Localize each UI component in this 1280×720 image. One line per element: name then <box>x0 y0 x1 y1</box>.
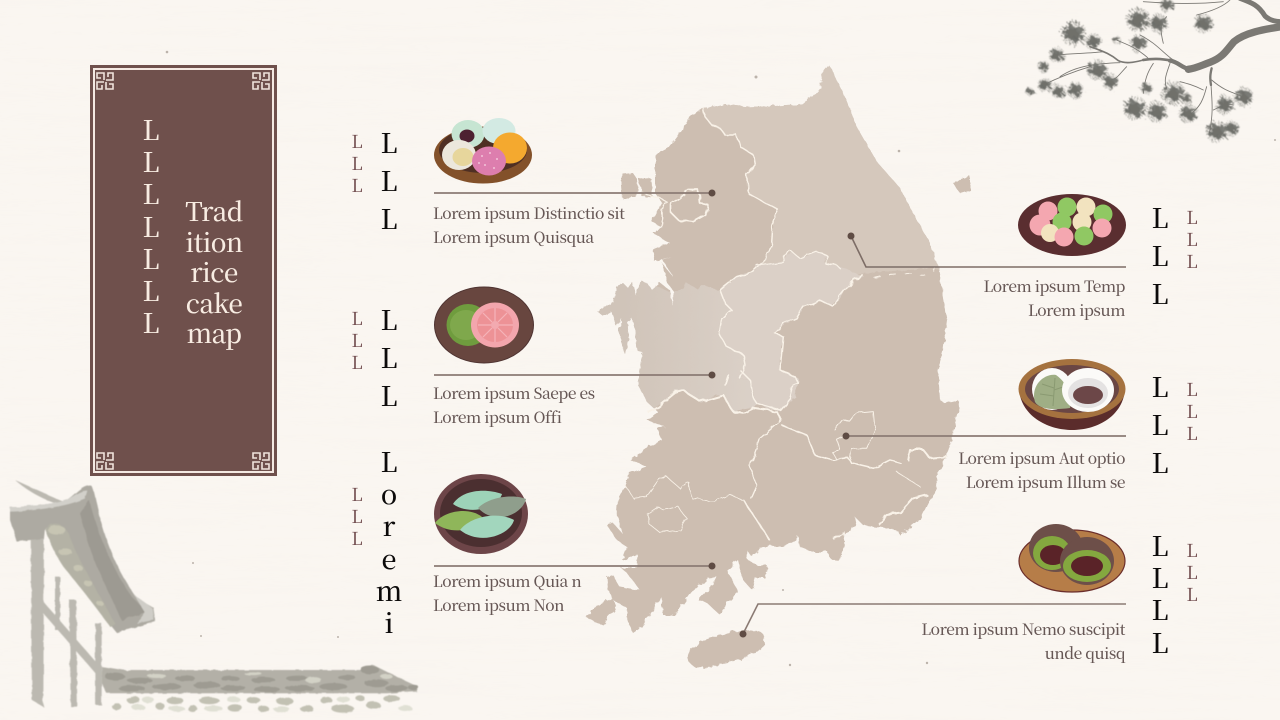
icon: plate with leaf-wrapped rice cakes <box>434 474 528 554</box>
item 1 large label: L <box>380 122 398 161</box>
panel title: rice <box>190 253 238 290</box>
item 1 description: Lorem ipsum Quisqua <box>433 226 594 248</box>
item 1 small label: L <box>351 128 363 154</box>
island: Ulleung <box>952 176 970 193</box>
item 3 small label: L <box>351 481 363 507</box>
panel vertical subtitle: L <box>142 302 160 341</box>
corner ornaments <box>96 72 270 470</box>
leader line: item 1 <box>434 190 716 196</box>
item 3 description <box>433 570 582 616</box>
panel title: Trad <box>185 192 243 229</box>
item 5 large label: L <box>1151 404 1168 443</box>
item 2 small label: L <box>351 327 363 353</box>
item 4 large label: L <box>1151 235 1168 274</box>
item 6 small label: L <box>1186 537 1198 563</box>
item 4 description <box>983 275 1125 321</box>
leader line: item 6 <box>740 604 1126 638</box>
icon: wooden plate with green-ringed rice cakes <box>1018 524 1126 593</box>
item 5 small label <box>1186 376 1198 446</box>
item 5 small label: L <box>1186 398 1198 424</box>
item 3 description: Lorem ipsum Non <box>433 594 564 616</box>
icon: plate with green and pink rice cakes <box>434 286 534 364</box>
leader line: item 5 <box>842 432 1126 440</box>
item 6 large label: L <box>1151 557 1168 596</box>
item 3 small label: L <box>351 525 363 551</box>
item 4 large label: L <box>1151 197 1168 236</box>
item 6 description: Lorem ipsum Nemo suscipit <box>921 618 1125 640</box>
item 1 large label <box>380 122 398 237</box>
item 2 description: Lorem ipsum Saepe es <box>433 382 595 404</box>
item 6 large label: L <box>1151 525 1168 564</box>
panel vertical subtitle: L <box>142 238 160 277</box>
panel vertical subtitle: L <box>142 206 160 245</box>
item 1 description <box>433 202 625 248</box>
item 6 description <box>921 618 1126 664</box>
specks on paper <box>166 51 1276 666</box>
item 3 large label: i <box>384 602 394 641</box>
item 5 large label: L <box>1151 366 1168 405</box>
item 6 small label <box>1186 537 1198 607</box>
item 2 small label: L <box>351 349 363 375</box>
item 2 large label <box>380 299 398 414</box>
item 1 small label: L <box>351 150 363 176</box>
map of South Korea <box>580 50 990 668</box>
item 6 large label: L <box>1151 622 1168 661</box>
region: Gangwon <box>704 66 940 274</box>
item 4 small label: L <box>1186 204 1198 230</box>
item 5 description: Lorem ipsum Aut optio <box>958 447 1125 469</box>
item 5 small label: L <box>1186 376 1198 402</box>
item 1 small label <box>351 128 363 198</box>
item 3 large label: e <box>382 538 396 577</box>
leader line: item 3 <box>434 562 716 570</box>
item 5 large label: L <box>1151 442 1168 481</box>
item 3 large label: r <box>383 505 395 544</box>
panel vertical subtitle: L <box>142 109 160 148</box>
item 3 large label: m <box>376 570 402 609</box>
item 5 small label: L <box>1186 420 1198 446</box>
panel title <box>185 192 243 351</box>
item 3 large label <box>376 441 402 641</box>
item 2 small label <box>351 305 363 375</box>
item 6 large label: L <box>1151 589 1168 628</box>
item 4 description: Lorem ipsum Temp <box>983 275 1125 297</box>
region: Chungbuk <box>718 250 863 412</box>
panel vertical subtitle <box>142 109 160 341</box>
panel title: ition <box>185 223 243 260</box>
item 5 description: Lorem ipsum Illum se <box>966 471 1125 493</box>
item 3 description: Lorem ipsum Quia n <box>433 570 581 592</box>
item 2 small label: L <box>351 305 363 331</box>
title panel <box>90 65 277 476</box>
item 4 description: Lorem ipsum <box>1028 299 1125 321</box>
island: Ganghwa <box>621 172 638 198</box>
item 2 large label: L <box>380 299 398 338</box>
item 1 description: Lorem ipsum Distinctio sit <box>433 202 624 224</box>
item 5 large label <box>1151 366 1168 481</box>
icon: wooden bowl with white rice cakes <box>1018 359 1126 430</box>
item 5 description <box>958 447 1125 493</box>
leader line: item 4 <box>848 232 1126 267</box>
region borders <box>625 108 947 540</box>
island: Jeju <box>688 630 765 668</box>
panel vertical subtitle: L <box>142 270 160 309</box>
item 1 small label: L <box>351 172 363 198</box>
illustration: hanok roof and stone wall <box>10 480 419 713</box>
item 4 small label: L <box>1186 226 1198 252</box>
item 3 large label: L <box>380 441 398 480</box>
item 4 large label: L <box>1151 273 1168 312</box>
item 4 small label <box>1186 204 1198 274</box>
panel vertical subtitle: L <box>142 141 160 180</box>
illustration: pine branch <box>1027 0 1280 140</box>
icon: bowl of assorted rice cakes <box>434 118 532 184</box>
icon: plate of colourful rice balls <box>1018 194 1126 256</box>
panel inner frame <box>93 68 274 473</box>
item 1 large label: L <box>380 198 398 237</box>
item 2 large label: L <box>380 337 398 376</box>
panel title: map <box>187 314 241 351</box>
item 6 small label: L <box>1186 581 1198 607</box>
island: Wando <box>587 598 617 625</box>
item 3 small label <box>351 481 363 551</box>
panel title: cake <box>186 284 242 321</box>
item 6 description: unde quisq <box>1045 642 1125 664</box>
item 2 description <box>433 382 595 428</box>
item 1 large label: L <box>380 160 398 199</box>
item 2 large label: L <box>380 375 398 414</box>
island: Gyodong <box>639 178 655 198</box>
item 4 small label: L <box>1186 248 1198 274</box>
item 2 description: Lorem ipsum Offi <box>433 406 561 428</box>
item 3 large label: o <box>381 473 397 512</box>
region: Chungnam <box>598 281 757 412</box>
item 3 small label: L <box>351 503 363 529</box>
item 6 large label <box>1151 525 1168 661</box>
item 4 large label <box>1151 197 1168 312</box>
leader line: item 2 <box>434 372 716 378</box>
item 6 small label: L <box>1186 559 1198 585</box>
panel vertical subtitle: L <box>142 173 160 212</box>
